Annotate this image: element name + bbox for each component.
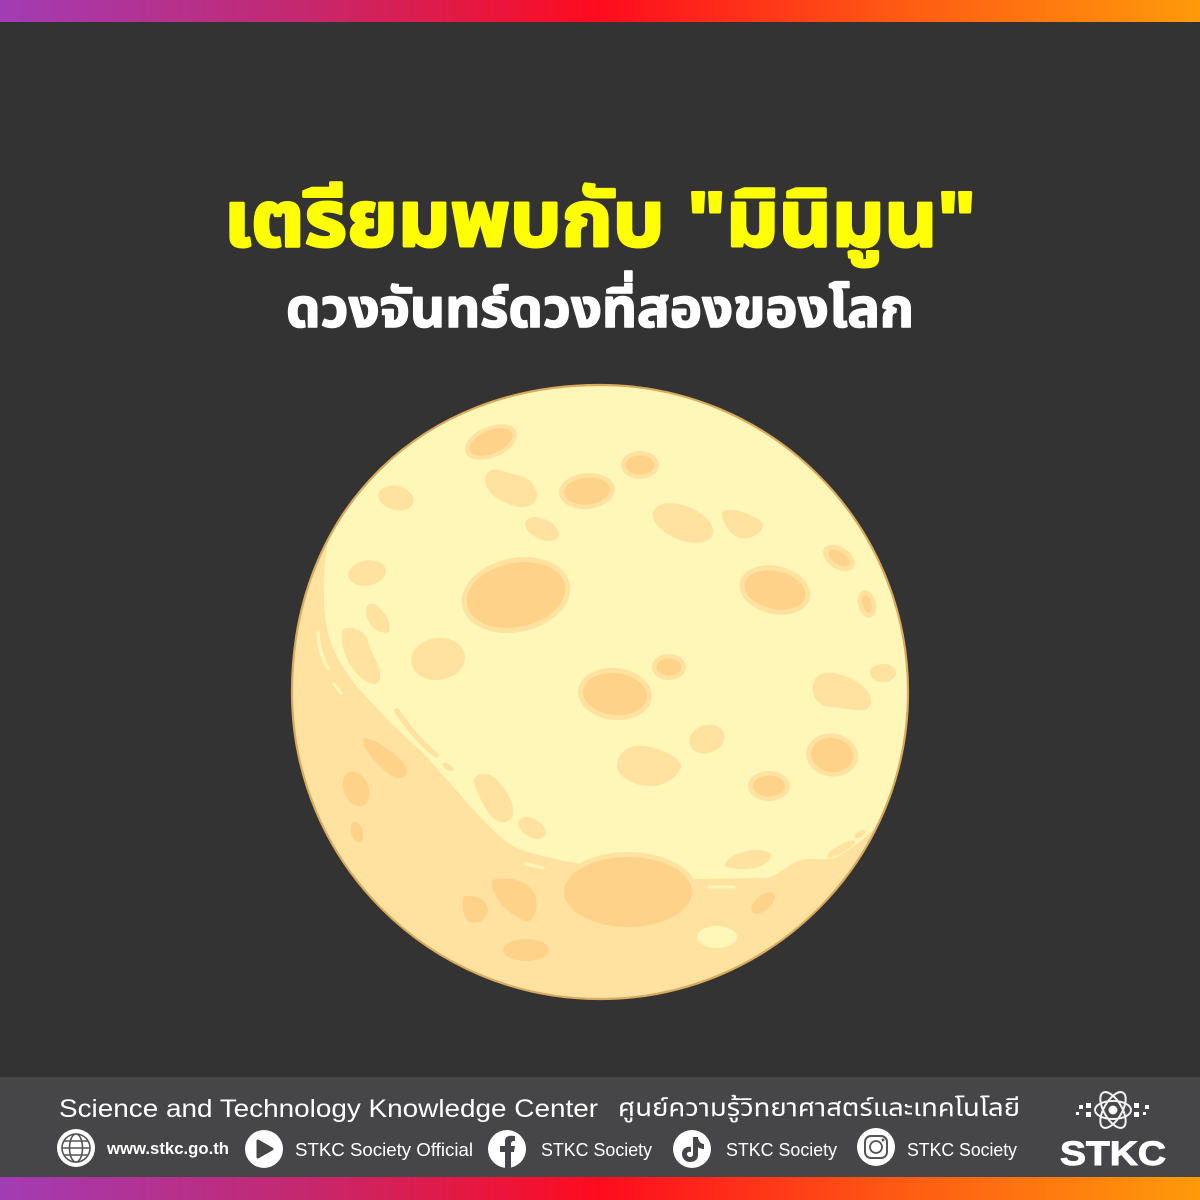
bottom gradient bar bbox=[0, 1177, 1200, 1200]
moon disc bbox=[292, 385, 908, 999]
moon highlights bbox=[318, 633, 734, 887]
icon: instagram bbox=[857, 1128, 895, 1166]
lit area bbox=[324, 386, 907, 879]
icon: facebook bbox=[488, 1130, 526, 1168]
craters: upper right bbox=[575, 451, 896, 724]
craters: upper left bbox=[342, 417, 616, 684]
logo wordmark: STKC bbox=[1060, 1135, 1166, 1173]
top gradient bar bbox=[0, 0, 1200, 22]
subtitle: ดวงจันทร์ดวงที่สองของโลก bbox=[286, 271, 914, 339]
icon: play bbox=[245, 1130, 283, 1168]
website link: www.stkc.go.th bbox=[106, 1139, 229, 1158]
icon: tiktok bbox=[673, 1130, 711, 1168]
craters: lower right bbox=[617, 720, 867, 869]
instagram label: STKC Society bbox=[907, 1140, 1017, 1160]
bright patch bbox=[697, 926, 737, 948]
moon illustration bbox=[290, 384, 910, 1000]
logo: STKC bbox=[1060, 1088, 1166, 1173]
youtube label: STKC Society Official bbox=[295, 1140, 473, 1160]
moon outline bbox=[292, 385, 908, 999]
footer band bbox=[0, 1077, 1200, 1177]
facebook label: STKC Society bbox=[541, 1140, 652, 1160]
tiktok label: STKC Society bbox=[726, 1140, 837, 1160]
large bottom crater bbox=[558, 852, 698, 934]
craters: lower left bbox=[338, 711, 779, 961]
logo atom mark bbox=[1076, 1088, 1149, 1132]
footer heading thai: ศูนย์ความรู้วิทยาศาสตร์และเทคโนโลยี bbox=[618, 1094, 1020, 1123]
icon: globe bbox=[57, 1129, 95, 1167]
footer heading english: Science and Technology Knowledge Center bbox=[59, 1095, 598, 1123]
title: เตรียมพบกับ "มินิมูน" bbox=[224, 175, 976, 267]
